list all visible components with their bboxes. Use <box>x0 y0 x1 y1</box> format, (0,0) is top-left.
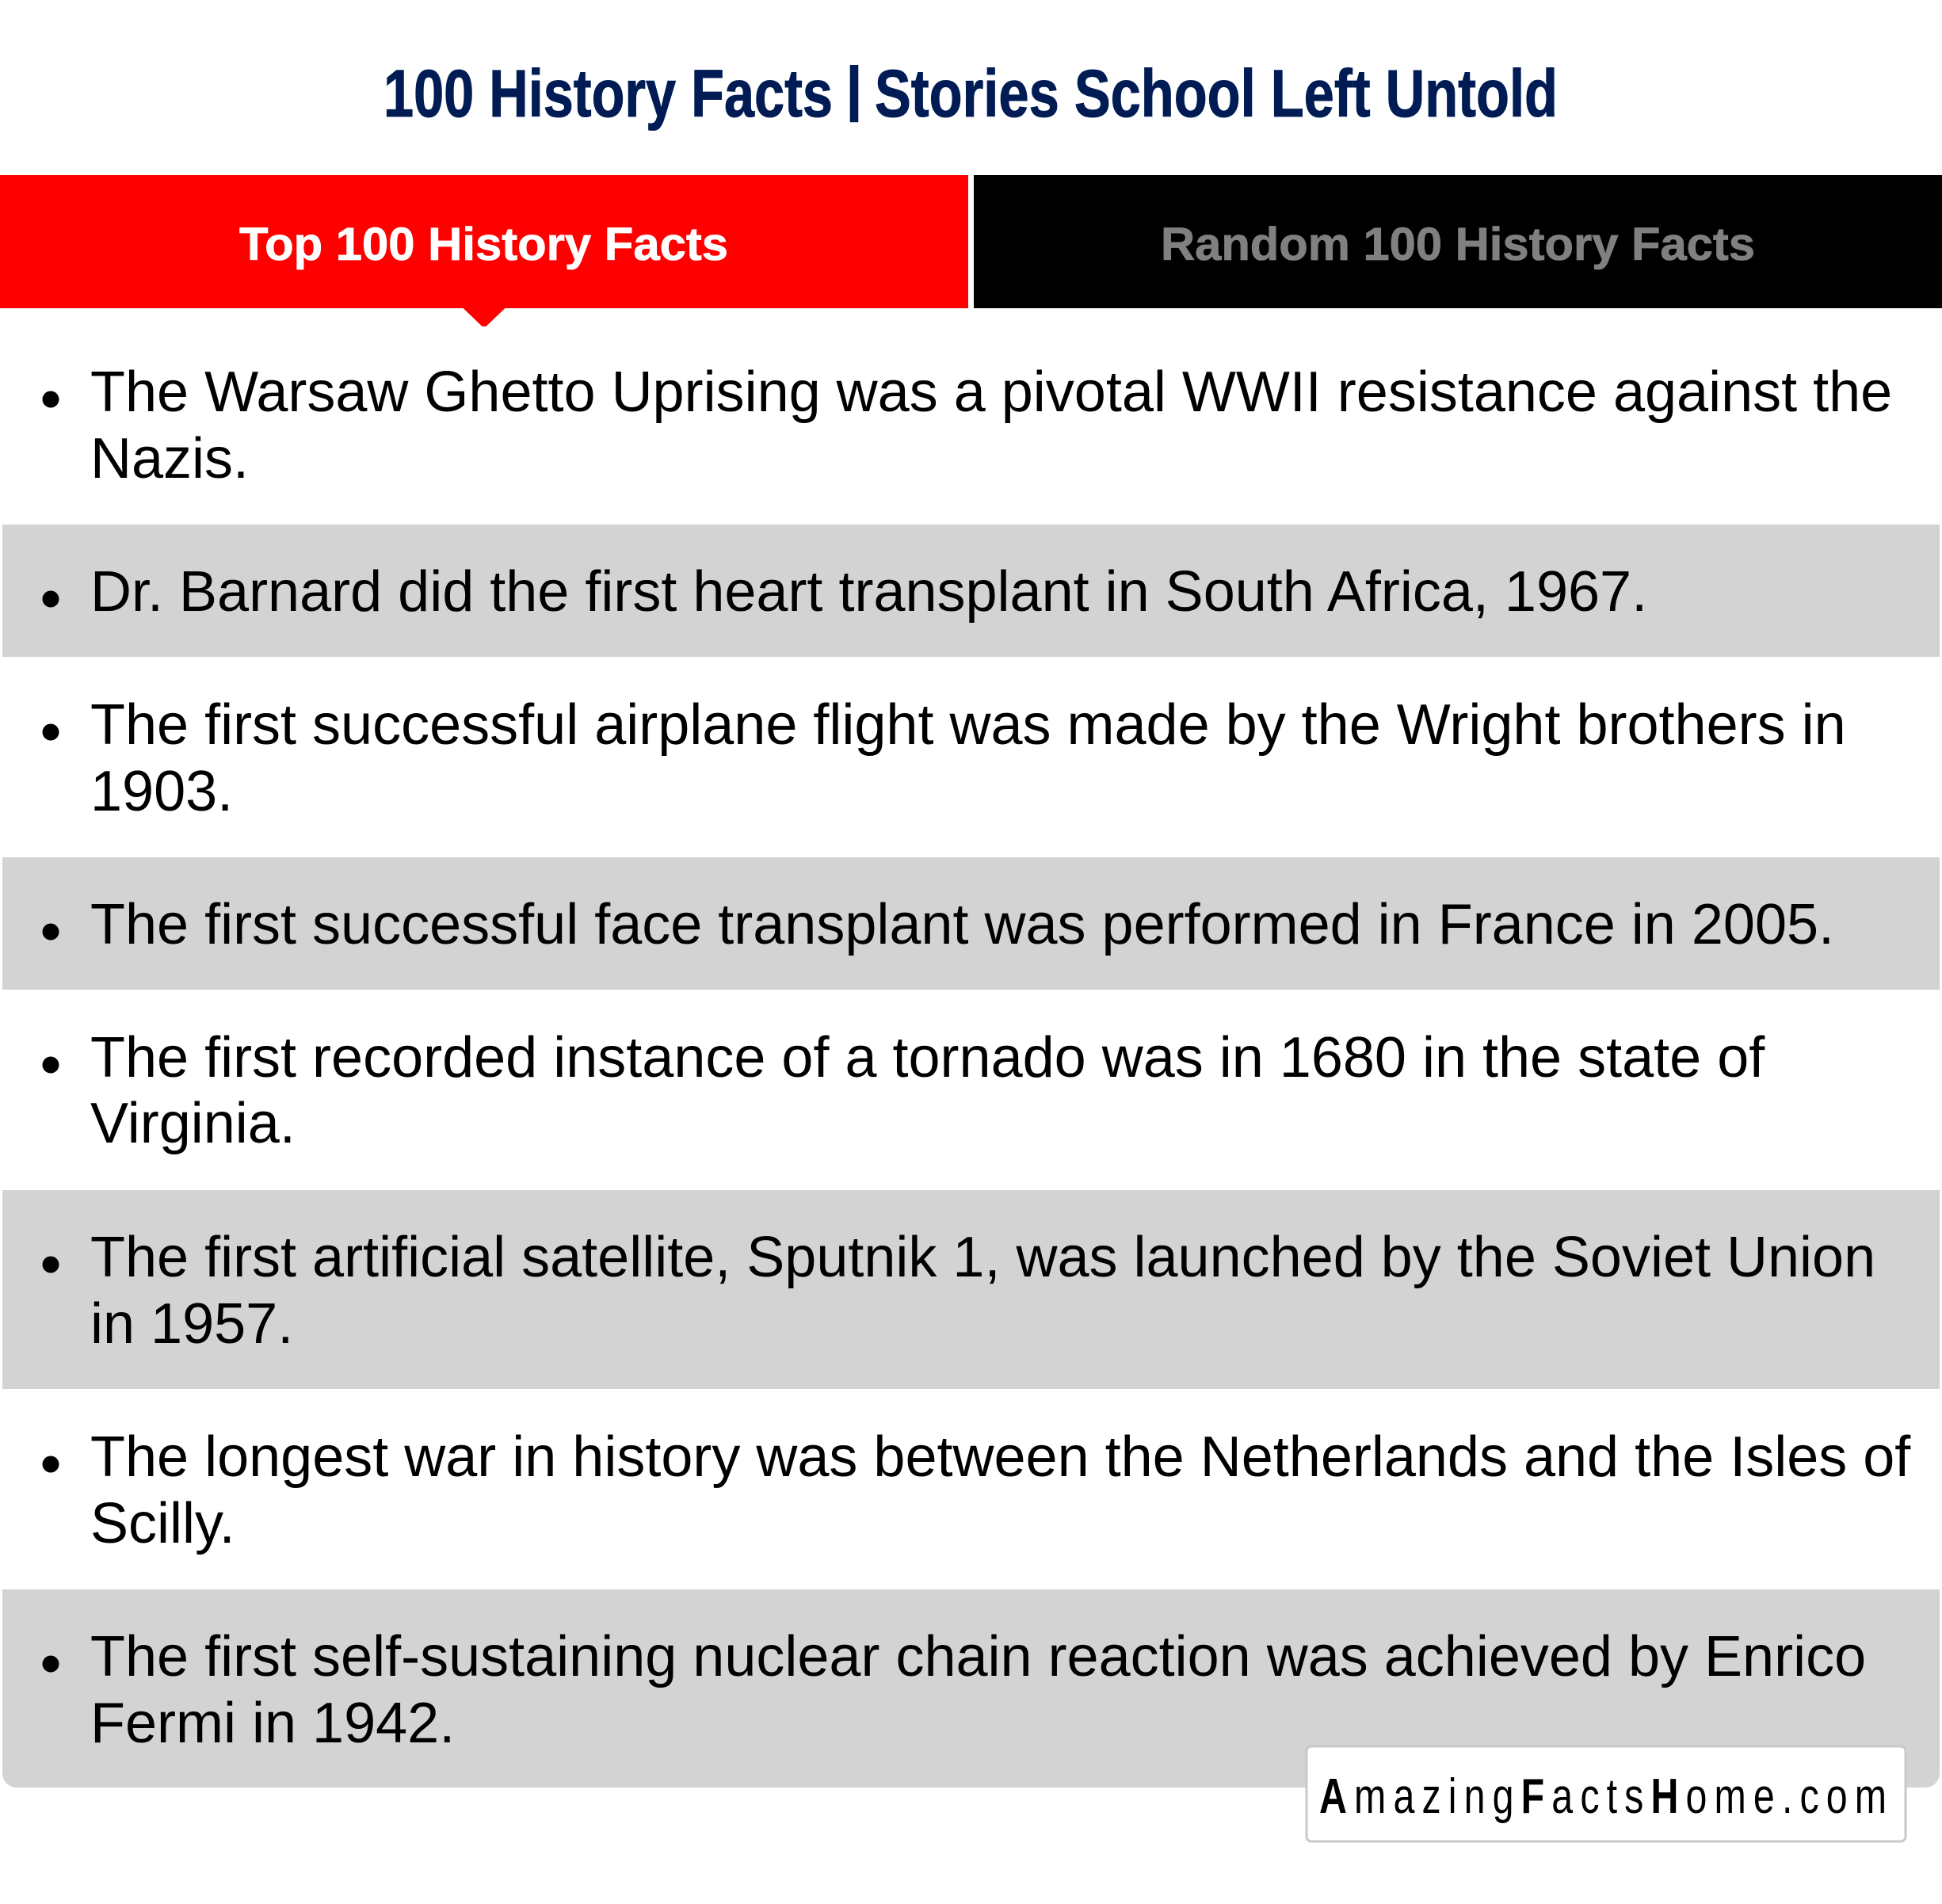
fact 1: Nazis. <box>90 427 249 490</box>
watermark: AmazingFactsHome.com: AmazingFactsHome.com <box>1319 1769 1894 1823</box>
fact 8 <box>2 1589 1940 1788</box>
fact 4 <box>2 857 1940 990</box>
watermark: AmazingFactsHome.com <box>1307 1746 1906 1841</box>
fact 2 <box>2 525 1940 657</box>
fact 3 <box>43 693 1846 823</box>
fact 7 <box>43 1425 1911 1555</box>
fact 6: The first artificial satellite, Sputnik 1, was launched by the Soviet Union <box>90 1226 1875 1289</box>
fact 7: Scilly. <box>90 1492 235 1555</box>
fact 3: The first successful airplane flight was made by the Wright brothers in <box>90 693 1846 757</box>
tab: random 100 history facts (inactive) <box>974 175 1942 308</box>
title: Stories School Left Untold <box>875 56 1558 131</box>
tab: top 100 history facts (active): Top 100 History Facts <box>239 219 728 270</box>
fact 2: Dr. Barnard did the first heart transplant in South Africa, 1967. <box>90 560 1647 624</box>
fact 3: 1903. <box>90 760 233 823</box>
fact 8: Fermi in 1942. <box>90 1692 455 1755</box>
title <box>383 55 1558 131</box>
tab: random 100 history facts (inactive): Random 100 History Facts <box>1161 219 1755 270</box>
title: 100 History Facts <box>383 56 833 131</box>
fact 1 <box>43 361 1892 490</box>
fact 6 <box>2 1190 1940 1389</box>
title: | <box>846 55 862 122</box>
tab: top 100 history facts (active) <box>0 175 968 326</box>
fact 1: The Warsaw Ghetto Uprising was a pivotal WWII resistance against the <box>90 361 1892 424</box>
fact 5 <box>43 1026 1765 1155</box>
fact 7: The longest war in history was between the Netherlands and the Isles of <box>90 1425 1911 1489</box>
fact 8: The first self-sustaining nuclear chain reaction was achieved by Enrico <box>90 1625 1866 1688</box>
fact 4: The first successful face transplant was performed in France in 2005. <box>90 893 1834 956</box>
fact 6: in 1957. <box>90 1292 293 1356</box>
fact 5: The first recorded instance of a tornado was in 1680 in the state of <box>90 1026 1765 1089</box>
fact 5: Virginia. <box>90 1092 296 1155</box>
